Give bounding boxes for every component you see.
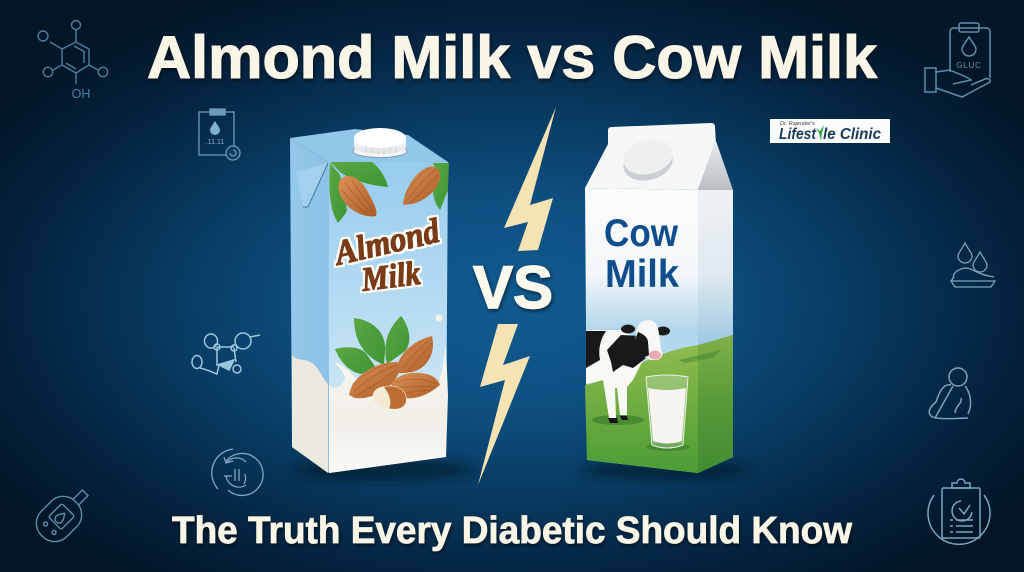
product label: Almond Milk bbox=[329, 211, 444, 299]
cow head bbox=[621, 320, 670, 360]
icon: drops over food bbox=[951, 243, 995, 287]
product label: Almond Milk: Almond bbox=[329, 211, 444, 273]
icon: seated person bbox=[929, 368, 971, 419]
carton shadow bbox=[580, 461, 750, 479]
milk splash, side bbox=[292, 355, 328, 473]
product label: Cow Milk: Cow bbox=[604, 212, 679, 255]
grass front bbox=[585, 345, 698, 473]
lightning bolt lower bbox=[478, 324, 530, 485]
logo figure bbox=[816, 125, 824, 141]
glass of milk bbox=[646, 375, 690, 451]
clinic logo bbox=[770, 119, 890, 143]
top leaves and almonds bbox=[329, 162, 449, 223]
front panel bbox=[585, 188, 698, 473]
bottom leaves bbox=[335, 316, 409, 374]
cow illustration bbox=[586, 320, 670, 425]
carton top face bbox=[290, 129, 448, 162]
clinic logo: le Clinic bbox=[823, 126, 881, 143]
subtitle: The Truth Every Diabetic Should Know bbox=[172, 510, 852, 552]
milk splash, front bbox=[329, 345, 448, 473]
carton front panel bbox=[328, 162, 448, 473]
clinic logo: Lifest bbox=[779, 126, 817, 143]
product label: Cow Milk bbox=[604, 212, 679, 296]
icon: molecule: OH bbox=[72, 87, 90, 101]
cow milk carton bbox=[580, 123, 750, 479]
top flap bbox=[608, 123, 716, 146]
product label: Almond Milk: Milk bbox=[359, 255, 423, 299]
title: Almond Milk vs Cow Milk bbox=[147, 24, 878, 91]
lightning bolt upper bbox=[504, 107, 556, 251]
carton side panel bbox=[290, 138, 329, 473]
icon: glucose meter bbox=[29, 480, 98, 549]
bottom almonds bbox=[349, 336, 440, 409]
carton shadow bbox=[295, 460, 475, 480]
icon: hand holding glucose clipboard: GLUC bbox=[956, 61, 982, 70]
side panel bbox=[698, 190, 733, 473]
icon: cell structure bbox=[192, 333, 260, 374]
almond milk carton bbox=[290, 128, 475, 480]
side fold bbox=[296, 163, 328, 207]
VS label: VS bbox=[473, 254, 553, 321]
cow body bbox=[586, 330, 642, 418]
grass side bbox=[698, 335, 733, 473]
gable front bbox=[585, 141, 716, 190]
cap bbox=[620, 134, 676, 186]
cow hooves bbox=[608, 416, 628, 423]
cow patches bbox=[586, 331, 646, 372]
icon: clipboard with drop bbox=[199, 109, 240, 160]
clinic logo: Dr. Rajender's bbox=[780, 121, 815, 127]
icon: clipboard with drop: .11.11 bbox=[206, 139, 224, 146]
milk droplet bbox=[436, 314, 442, 322]
gable side bbox=[698, 141, 733, 190]
bottle cap bbox=[353, 128, 407, 158]
grass shadow bbox=[678, 350, 722, 363]
icon: checklist clipboard bbox=[928, 479, 990, 544]
icon: cycle clock bbox=[212, 449, 263, 495]
product label: Cow Milk: Milk bbox=[605, 253, 679, 296]
icon: molecule bbox=[38, 20, 108, 101]
icon: hand holding glucose clipboard bbox=[925, 23, 990, 97]
